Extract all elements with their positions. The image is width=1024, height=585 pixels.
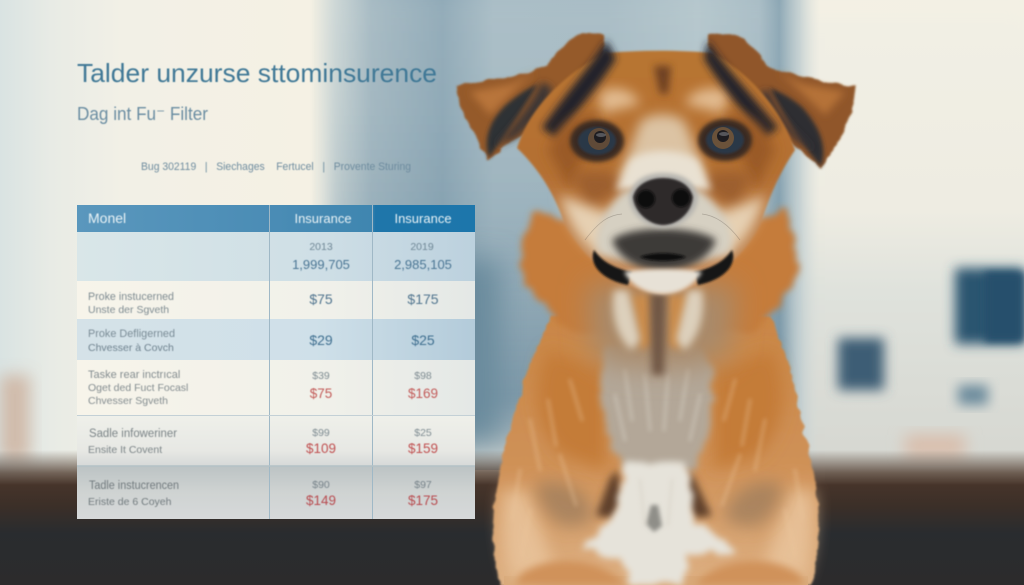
row: price two: $25 — [411, 332, 435, 348]
head — [517, 51, 795, 294]
row: price four: Sadle infoweriner — [89, 428, 177, 440]
whiskers — [585, 214, 740, 240]
row: year and totals: 2013 — [309, 241, 333, 253]
row: year and totals: 2019 — [410, 241, 434, 253]
row: price four: $159 — [408, 441, 438, 456]
row: price five — [77, 466, 475, 519]
row: year and totals: 2,985,105 — [394, 257, 452, 272]
row: price five: $175 — [408, 493, 438, 508]
row: price three: Oget ded Fuct Focasl — [88, 382, 188, 394]
row: price four: $25 — [414, 427, 432, 439]
row: price three: $98 — [414, 370, 432, 382]
cheek fur — [560, 195, 765, 255]
meta line: Bug 302119 | Siechages Fertucel | Provente Sturing — [141, 161, 411, 173]
muzzle — [596, 190, 732, 264]
subtitle: Dag int Fu⁻ Filter — [77, 104, 208, 124]
row: price three: Taske rear inctrıcal — [88, 369, 180, 381]
table header: Monel — [88, 210, 126, 226]
dog body and chest — [493, 315, 819, 585]
row: price three: Chvesser Sgveth — [88, 395, 168, 407]
row: price one: Unste der Sgveth — [88, 304, 169, 316]
forehead markings — [542, 40, 778, 208]
row: year and totals: 1,999,705 — [292, 257, 350, 272]
row: price three: $169 — [408, 386, 438, 401]
row: price two: Chvesser à Covch — [88, 342, 174, 354]
table header: Insurance — [294, 211, 352, 226]
left eye — [570, 120, 624, 162]
row: price five: $149 — [306, 493, 336, 508]
comparison table — [77, 205, 475, 519]
row: price five: $97 — [414, 479, 432, 491]
title: Talder unzurse sttominsurence — [77, 58, 437, 88]
left ear — [456, 32, 604, 160]
row: price four: $99 — [312, 427, 330, 439]
table header — [77, 205, 475, 232]
neck markings — [588, 285, 736, 375]
row: price three: $75 — [310, 386, 332, 401]
row: price one: $75 — [309, 291, 333, 307]
row: price four — [77, 415, 475, 466]
table header: Insurance — [394, 211, 452, 226]
neck ruff fur — [521, 210, 797, 332]
nose bridge — [618, 114, 706, 180]
dog illustration — [456, 32, 856, 585]
row: price five: Eriste de 6 Coyeh — [88, 496, 172, 508]
row: price three — [77, 360, 475, 415]
row: price four: Ensite It Covent — [88, 444, 162, 456]
row: price five: Tadle instucrencen — [89, 480, 179, 492]
row: price two: $29 — [309, 332, 333, 348]
right eye — [698, 119, 752, 161]
row: price three: $39 — [312, 370, 330, 382]
row: price two: Proke Defligerned — [88, 328, 175, 340]
row: price four: $109 — [306, 441, 336, 456]
fur strokes on body — [512, 380, 803, 555]
row: year and totals — [77, 232, 475, 281]
row: price one: Proke instucerned — [88, 291, 174, 303]
mouth and jowls — [593, 229, 733, 294]
right ear — [708, 32, 856, 170]
row: price one: $175 — [407, 291, 439, 307]
row: price one — [77, 281, 475, 319]
row: price two — [77, 319, 475, 360]
row: price five: $90 — [312, 479, 330, 491]
nose — [629, 173, 698, 228]
